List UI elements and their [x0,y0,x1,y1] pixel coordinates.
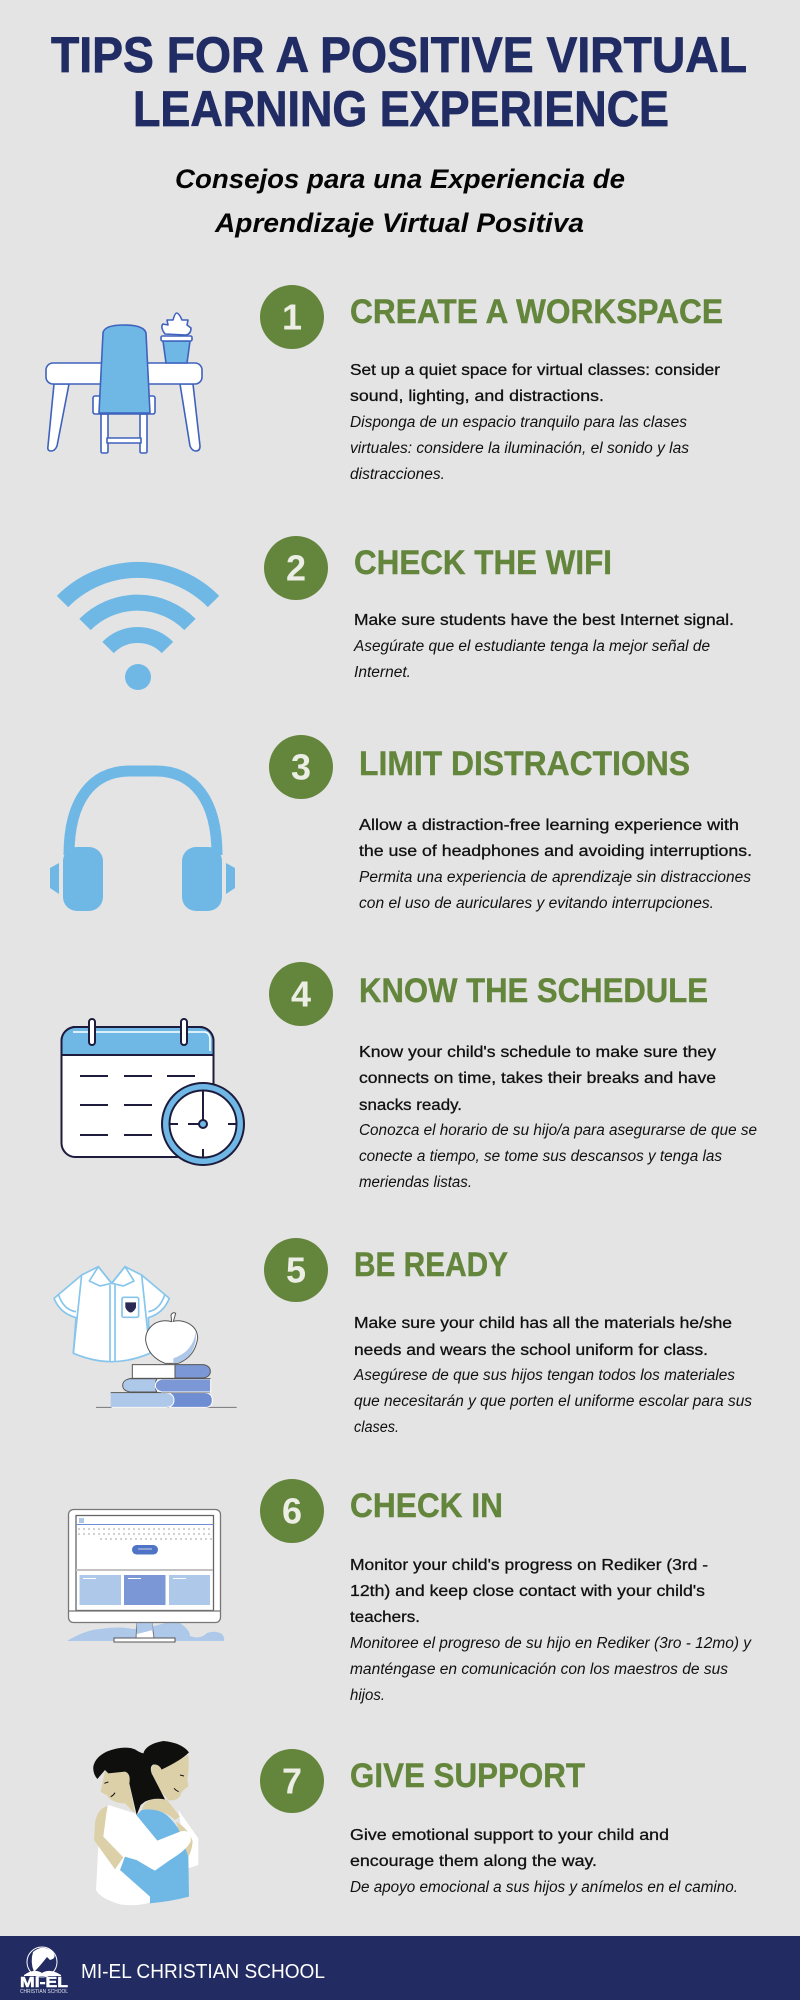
heading 2: CHECK THE WIFI [354,544,612,582]
subtitle in Spanish [175,164,625,238]
tip 7: give support [93,1741,738,1905]
body text 4: snacks ready. [359,1097,462,1114]
heading 5: BE READY [354,1246,508,1284]
body text 6: Monitoree el progreso de su hijo en Rediker (3ro - 12mo) y [350,1635,752,1652]
number badge 3: 3 [291,746,311,788]
body text 4: connects on time, takes their breaks and have [359,1070,716,1087]
heading 4: KNOW THE SCHEDULE [359,972,708,1010]
tip 5: be ready [54,1238,752,1436]
school name: MI-EL CHRISTIAN SCHOOL [81,1961,325,1983]
body text 7: De apoyo emocional a sus hijos y anímelos en el camino. [350,1879,738,1896]
footer bar [0,1936,800,2000]
heading 6: CHECK IN [350,1487,503,1525]
body text 4: Know your child's schedule to make sure they [359,1044,716,1061]
number badge 4: 4 [291,974,311,1014]
body text 6: manténgase en comunicación con los maestros de sus [350,1661,728,1678]
number badge 5: 5 [286,1250,306,1290]
body text 2: Make sure students have the best Internet signal. [354,612,734,629]
tip 4: know the schedule [62,962,757,1191]
heading 7: GIVE SUPPORT [350,1757,585,1795]
number badge 3 [269,735,333,799]
body text 4 [359,1044,757,1191]
title: LEARNING EXPERIENCE [133,81,669,137]
body text 5: que necesitarán y que porten el uniforme escolar para sus [354,1393,752,1410]
icon: computer monitor [67,1510,224,1642]
body text 2: Asegúrate que el estudiante tenga la mejor señal de [353,638,710,655]
body text 1: sound, lighting, and distractions. [350,388,604,405]
body text 2 [353,612,734,681]
number badge 2 [264,536,328,600]
body text 6 [350,1557,752,1704]
body text 6: hijos. [350,1687,385,1704]
body text 5: Asegúrese de que sus hijos tengan todos los materiales [353,1367,735,1384]
body text 7 [350,1827,738,1896]
body text 7: encourage them along the way. [350,1853,597,1870]
body text 1: Set up a quiet space for virtual classes: consider [350,362,721,379]
number badge 2: 2 [286,548,306,588]
number badge 7: 7 [282,1760,302,1802]
title [51,27,747,137]
number badge 1: 1 [282,296,302,338]
tip 3: limit distractions [50,735,752,912]
number badge 7 [260,1749,324,1813]
body text 4: conecte a tiempo, se tome sus descansos y tenga las [359,1148,722,1165]
body text 3: Allow a distraction-free learning experience with [359,817,739,834]
icon: desk and chair [46,313,202,453]
heading 3: LIMIT DISTRACTIONS [359,745,690,783]
body text 6: teachers. [350,1609,420,1626]
tip 2: check the wifi [62,536,734,690]
body text 5: clases. [354,1419,399,1436]
icon: calendar and clock [62,1019,244,1165]
body text 7: Give emotional support to your child and [350,1827,669,1844]
body text 5: Make sure your child has all the materials he/she [354,1315,732,1332]
body text 1: Disponga de un espacio tranquilo para las clases [350,414,687,431]
body text 3 [359,817,752,912]
body text 3: Permita una experiencia de aprendizaje sin distracciones [359,869,751,886]
icon: two people hugging [93,1741,198,1905]
number badge 1 [260,285,324,349]
title: TIPS FOR A POSITIVE VIRTUAL [51,27,747,83]
body text 3: the use of headphones and avoiding interruptions. [359,843,752,860]
body text 4: Conozca el horario de su hijo/a para asegurarse de que se [359,1122,757,1139]
tip 1: create a workspace [46,285,723,483]
body text 1: distracciones. [350,466,445,483]
number badge 5 [264,1238,328,1302]
body text 4: meriendas listas. [359,1174,472,1191]
number badge 6 [260,1479,324,1543]
number badge 4 [269,962,333,1026]
heading 1: CREATE A WORKSPACE [350,293,723,331]
school logo: MI-EL [20,1974,68,1991]
icon: wifi [62,570,214,690]
body text 6: Monitor your child's progress on Rediker (3rd - [350,1557,708,1574]
body text 1 [350,362,721,483]
body text 6: 12th) and keep close contact with your child's [350,1583,705,1600]
body text 5: needs and wears the school uniform for class. [354,1342,708,1359]
body text 2: Internet. [354,664,411,681]
tip 6: check in [67,1479,752,1704]
school logo [20,1947,68,1995]
subtitle in Spanish: Consejos para una Experiencia de [175,164,625,194]
body text 3: con el uso de auriculares y evitando interrupciones. [359,895,714,912]
number badge 6: 6 [282,1490,302,1532]
icon: headphones [50,771,235,911]
subtitle in Spanish: Aprendizaje Virtual Positiva [214,208,584,238]
body text 5 [353,1315,752,1436]
body text 1: virtuales: considere la iluminación, el sonido y las [350,440,689,457]
school logo: CHRISTIAN SCHOOL [20,1989,68,1995]
icon: uniform shirt, apple and books [54,1267,237,1407]
